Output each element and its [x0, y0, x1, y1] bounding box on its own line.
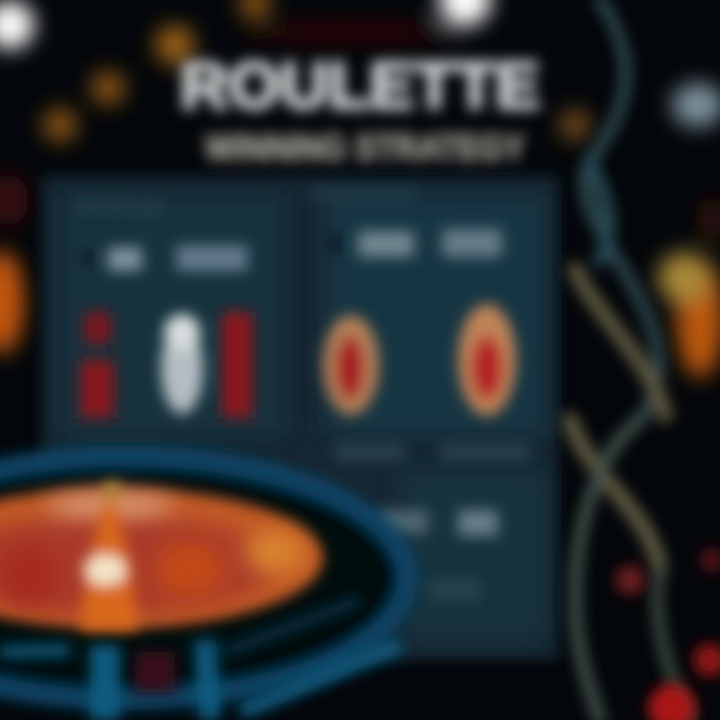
side glows: [0, 198, 720, 378]
wheel face: [0, 488, 323, 628]
column labels: [85, 229, 502, 271]
orange figures: [323, 304, 516, 416]
wheel outer rim: [0, 456, 407, 700]
wheel segments: [0, 493, 305, 605]
main panel: [42, 176, 558, 660]
ribbons: [570, 0, 690, 720]
wheel inner ring: [0, 515, 275, 615]
red bars and figure: [80, 312, 252, 418]
wheel spokes: [0, 600, 400, 720]
red lights: [615, 547, 720, 720]
title: [180, 48, 540, 168]
panel heading left: Strategy: [74, 195, 165, 217]
roulette wheel: [0, 456, 407, 720]
caption text: [335, 444, 530, 600]
wheel hub shadow: [135, 652, 175, 692]
title line 1: ROULETTE: [180, 48, 540, 122]
wheel center: [80, 481, 138, 630]
title line 2: WINNING STRATEGY: [205, 127, 525, 168]
panel heading right: Outcomes: [312, 183, 417, 205]
bokeh lights: [0, 0, 720, 226]
